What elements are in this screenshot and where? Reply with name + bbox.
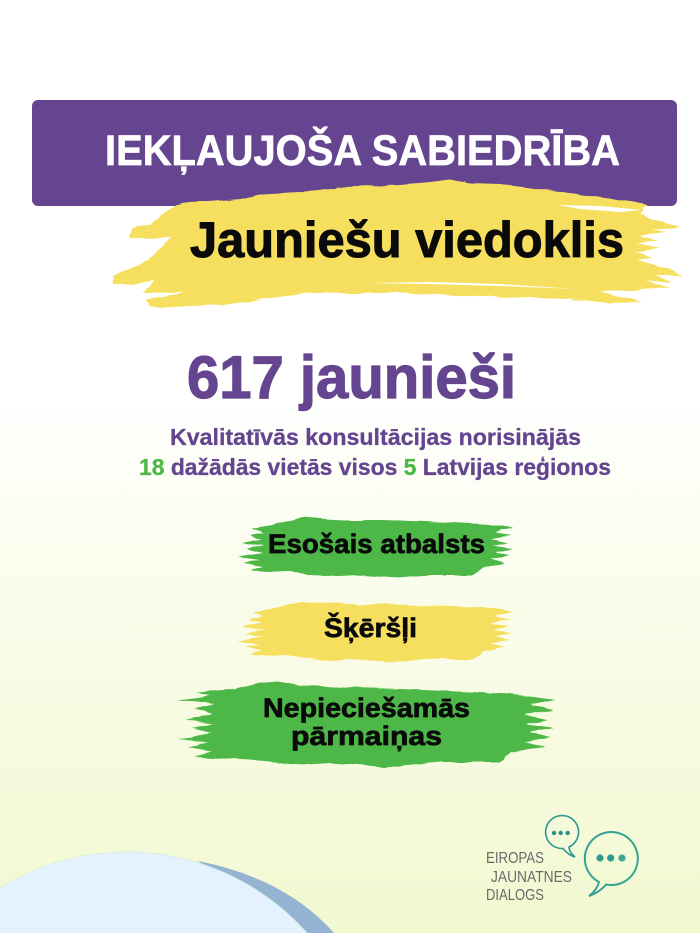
brush label: needed changes xyxy=(178,682,556,767)
subtitle text: Jauniešu viedoklis xyxy=(190,212,624,268)
big number heading: 617 jaunieši xyxy=(187,344,516,411)
logo text: JAUNATNES xyxy=(491,869,572,886)
label text xyxy=(263,693,470,751)
background circles xyxy=(0,852,334,933)
label text: Šķēršļi xyxy=(324,612,417,643)
icon: large speech bubble xyxy=(585,832,638,896)
icon: small speech bubble xyxy=(546,816,579,857)
logo text: DIALOGS xyxy=(486,887,544,904)
brush streaks xyxy=(366,205,642,289)
label text: Esošais atbalsts xyxy=(268,529,485,559)
subtitle brush stroke xyxy=(113,180,683,308)
brush label: barriers xyxy=(238,601,513,662)
label text: pārmaiņas xyxy=(291,721,442,751)
label text: Nepieciešamās xyxy=(263,693,470,723)
title banner xyxy=(32,100,677,206)
brush label: existing support xyxy=(238,517,513,578)
logo text: EIROPAS xyxy=(486,850,544,867)
description line 1: Kvalitatīvās konsultācijas norisinājās xyxy=(170,424,581,450)
title text: IEKĻAUJOŠA SABIEDRĪBA xyxy=(105,126,620,175)
logo: Eiropas Jaunatnes Dialogs xyxy=(486,816,638,904)
logo text xyxy=(486,850,572,904)
description line 2: 18 dažādās vietās visos 5 Latvijas reģionos xyxy=(139,454,611,480)
